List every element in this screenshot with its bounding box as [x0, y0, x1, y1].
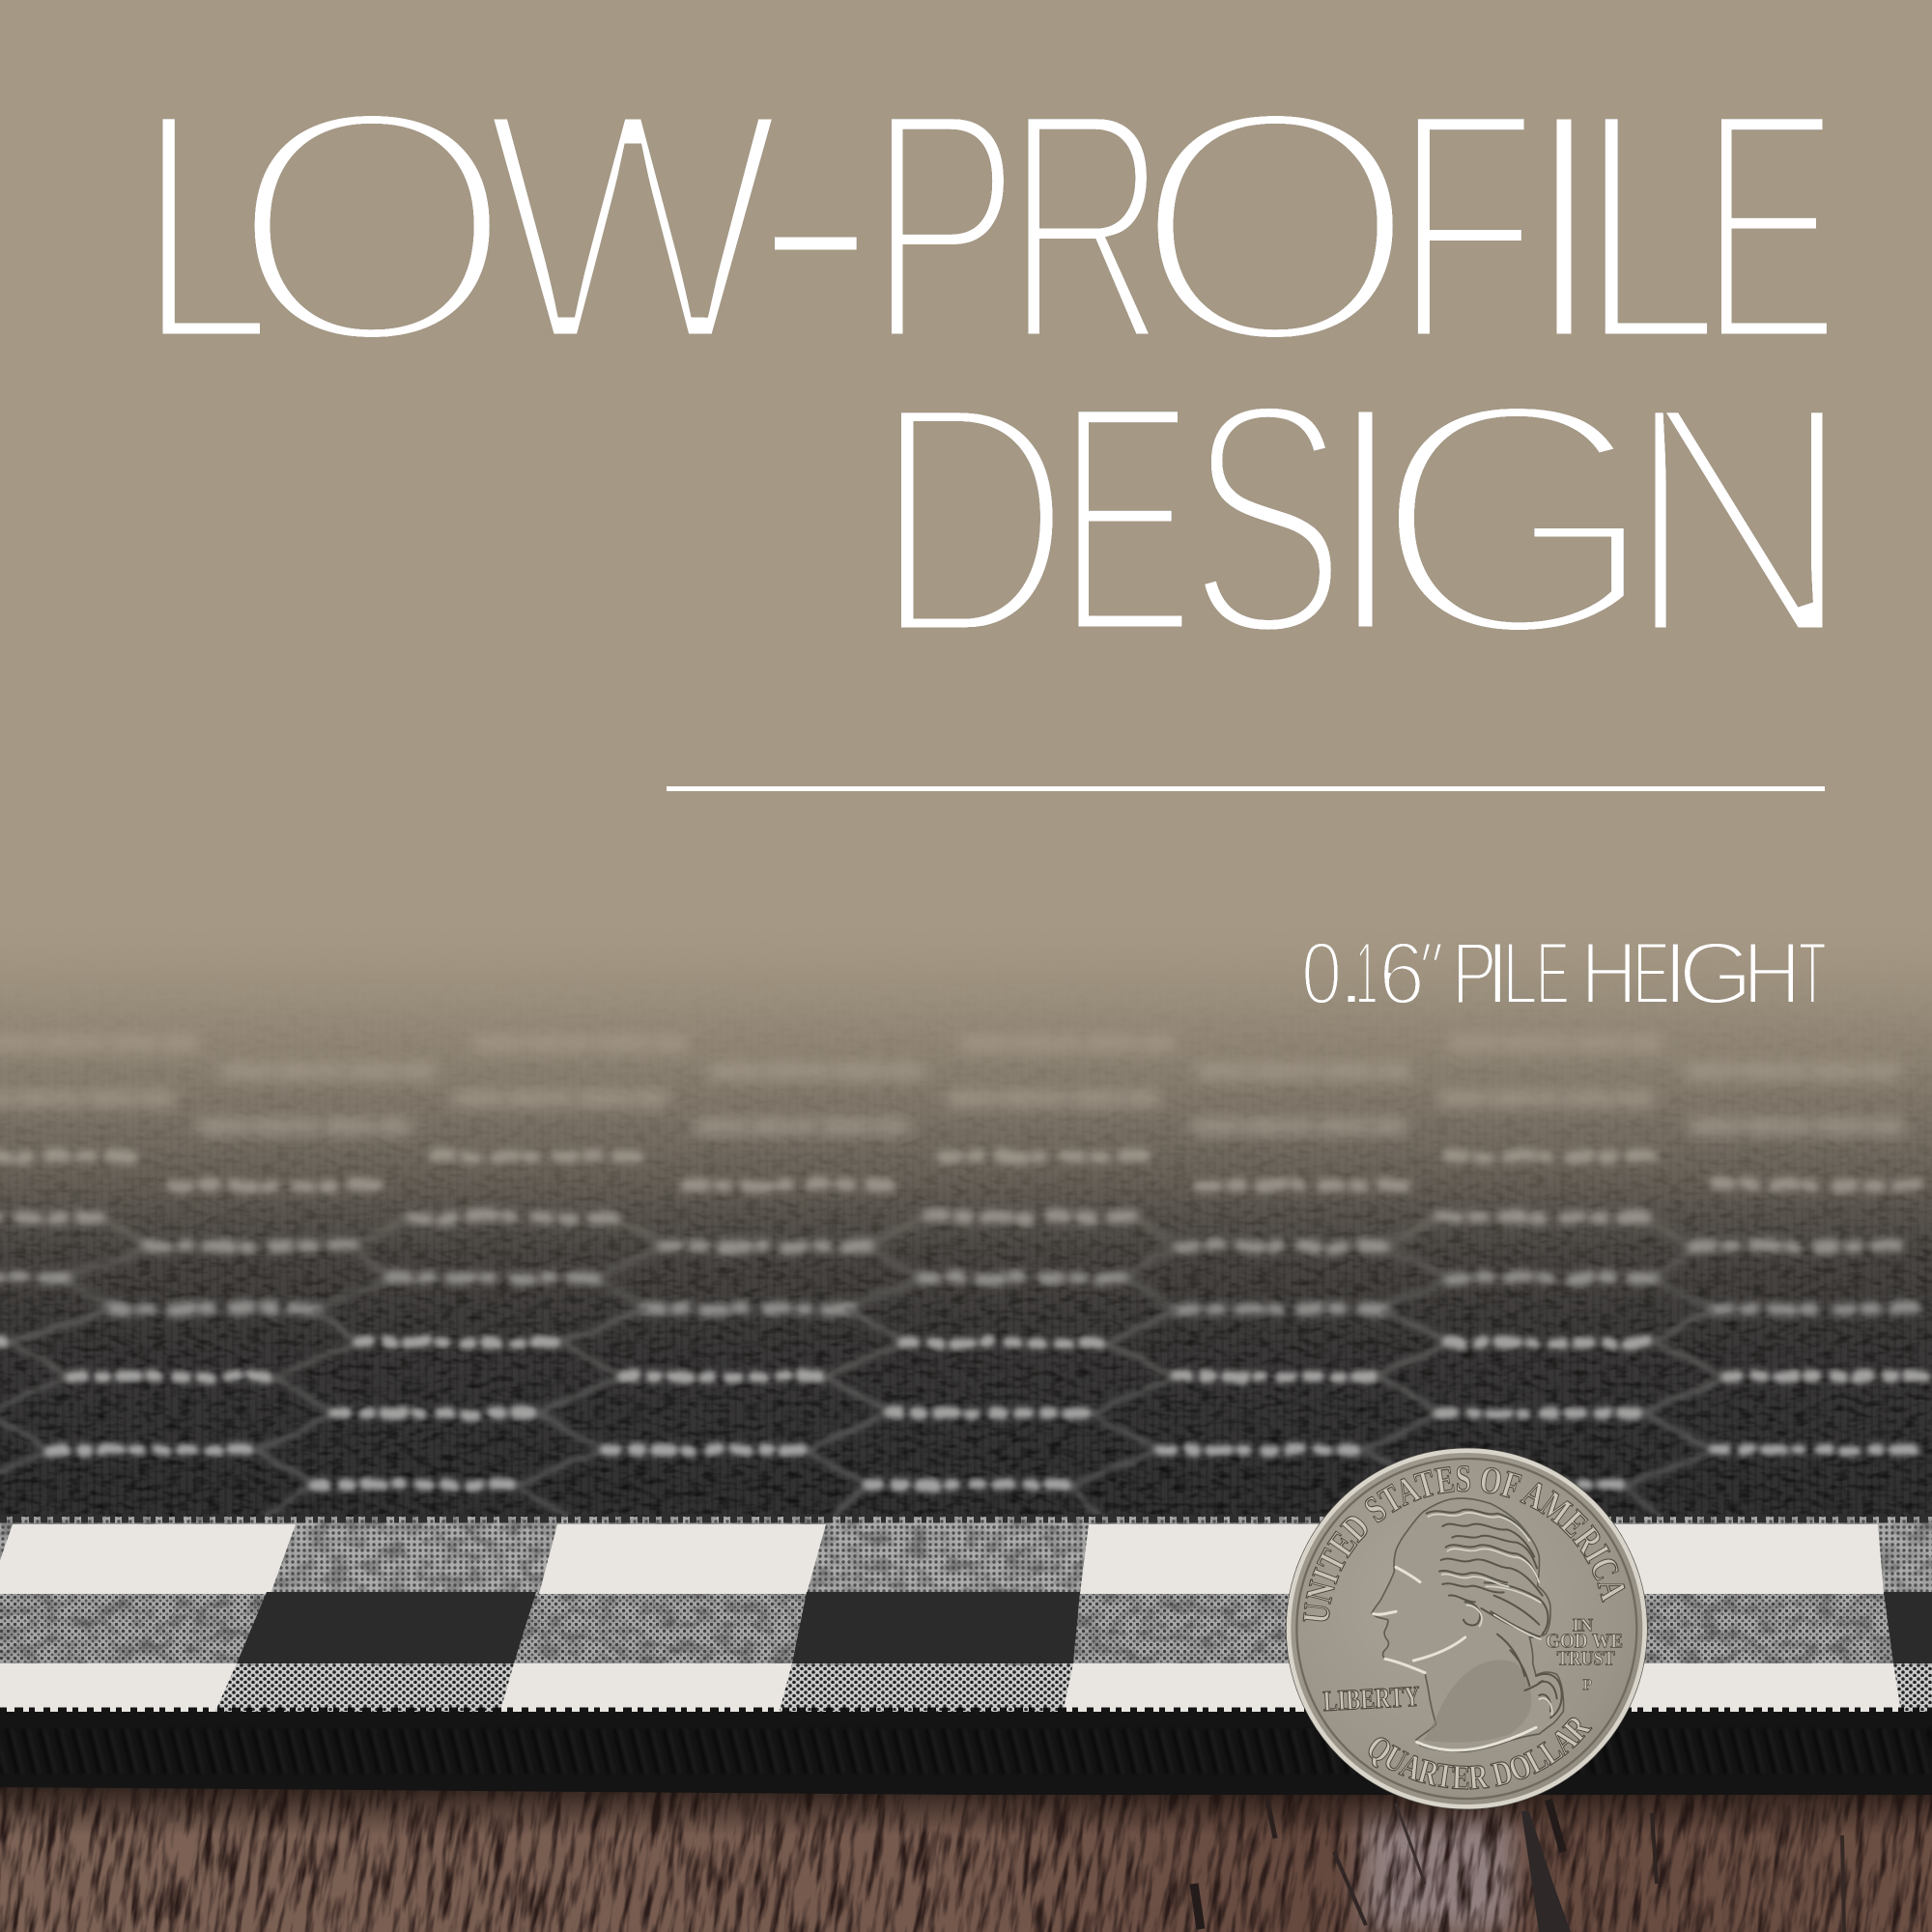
title: DESIGN: G — [1370, 330, 1662, 708]
subtitle: pile height: E — [1633, 924, 1670, 1023]
coin inscription: IN — [1573, 1615, 1593, 1635]
icon: quarter dollar coin — [1286, 1447, 1648, 1810]
gingham border band — [0, 1517, 1932, 1718]
coin inscription: LIBERTY — [1322, 1681, 1421, 1718]
coin inscription: QUARTER DOLLAR — [1368, 1718, 1593, 1790]
divider line — [667, 786, 1825, 791]
title: LOW-PROFILE — [137, 28, 1840, 415]
title: DESIGN: I — [1318, 330, 1413, 708]
rug binding edge — [0, 1711, 1932, 1795]
subtitle: pile height: H — [1743, 924, 1801, 1023]
subtitle: pile height: 1 — [1355, 924, 1378, 1023]
coin inscription: P — [1583, 1677, 1592, 1693]
rug field with honeycomb pattern — [0, 869, 1932, 1536]
wood floor — [0, 1782, 1932, 1932]
title: DESIGN: S — [1186, 333, 1347, 705]
title: LOW-PROFILE: - — [749, 28, 883, 406]
subtitle: pile height: L — [1502, 924, 1538, 1023]
subtitle: pile height: 6 — [1378, 924, 1425, 1023]
subtitle: pile height: P — [1452, 924, 1497, 1023]
coin portrait — [1372, 1498, 1564, 1751]
subtitle: pile height: I — [1485, 924, 1511, 1023]
title: DESIGN — [871, 330, 1858, 708]
subtitle: pile height: E — [1536, 924, 1570, 1023]
title: LOW-PROFILE: R — [1005, 41, 1168, 412]
title: LOW-PROFILE: F — [1393, 41, 1539, 412]
title: LOW-PROFILE: L — [1578, 41, 1721, 412]
title: DESIGN: N — [1620, 331, 1858, 707]
coin inscription: UNITED STATES OF AMERICA — [1302, 1465, 1625, 1622]
subtitle: pile height: T — [1799, 924, 1827, 1023]
title: LOW-PROFILE: I — [1513, 38, 1615, 415]
fog gradient fading rug into backdrop — [0, 869, 1932, 1488]
title: DESIGN: D — [871, 331, 1073, 707]
title: LOW-PROFILE: O — [1130, 38, 1421, 415]
subtitle: pile height: 0 — [1301, 924, 1342, 1023]
title: LOW-PROFILE: E — [1699, 41, 1840, 412]
coin inscription — [1302, 1465, 1625, 1790]
title: LOW-PROFILE: L — [137, 41, 273, 412]
subtitle: pile height — [1301, 924, 1827, 1023]
title: DESIGN: E — [1057, 333, 1195, 705]
coin inscription: GOD WE — [1546, 1632, 1623, 1653]
subtitle: pile height: . — [1334, 924, 1369, 1023]
subtitle: pile height: " — [1402, 924, 1450, 1023]
coin inscription: TRUST — [1557, 1649, 1615, 1670]
subtitle: pile height: H — [1580, 924, 1637, 1023]
subtitle: pile height: G — [1677, 924, 1753, 1023]
title: LOW-PROFILE: P — [867, 41, 1021, 412]
subtitle: pile height: I — [1662, 924, 1689, 1023]
title: LOW-PROFILE: W — [481, 38, 784, 415]
title: LOW-PROFILE: O — [227, 38, 518, 415]
